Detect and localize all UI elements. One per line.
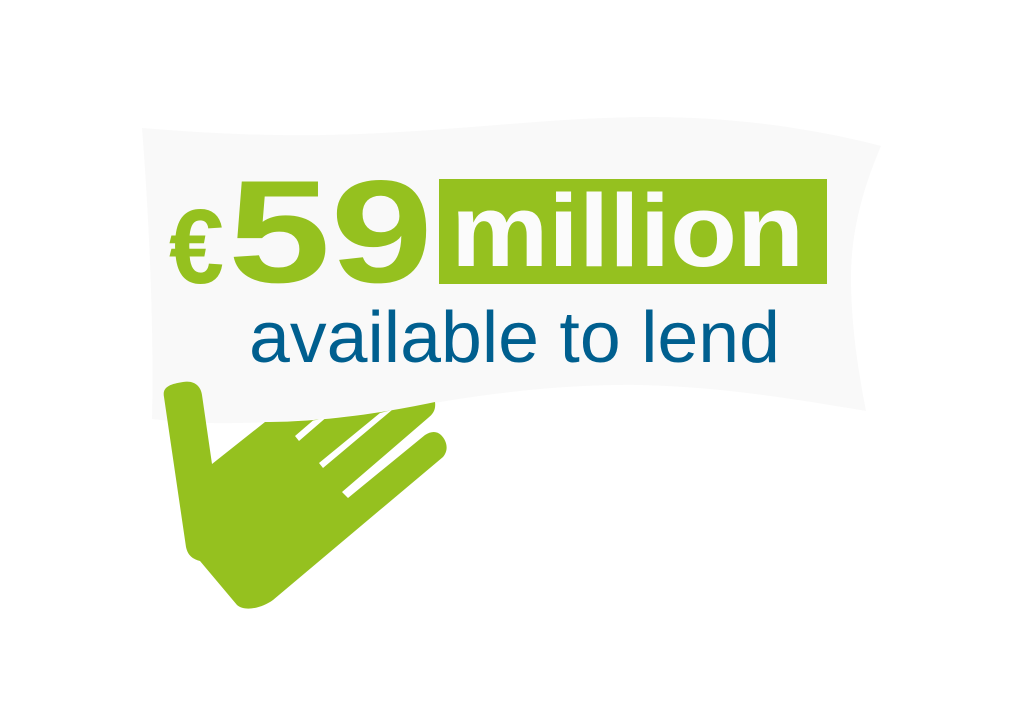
green label background xyxy=(439,179,827,284)
heading: euro sign: € xyxy=(169,188,224,306)
icon: green hand holding banner xyxy=(164,382,447,609)
subheading: available to lend: available to lend xyxy=(249,298,780,378)
heading: number 59: 59 xyxy=(228,150,433,313)
million text: million xyxy=(451,173,804,288)
finger gap 2 xyxy=(319,410,392,468)
heading: million label xyxy=(439,173,827,288)
panel: waving banner xyxy=(142,117,881,423)
finger gap 1 xyxy=(295,418,325,441)
